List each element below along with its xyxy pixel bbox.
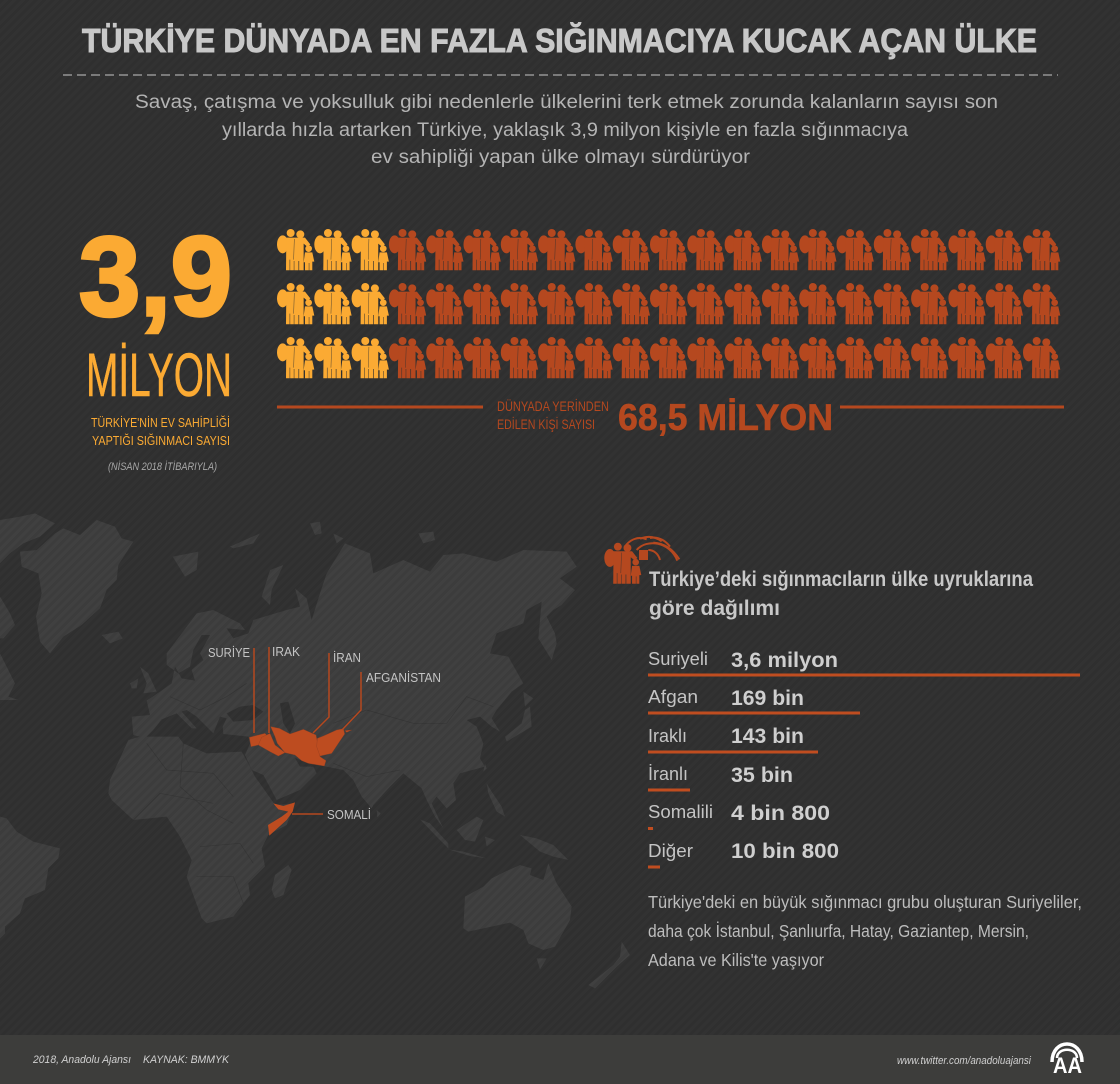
title: TÜRKİYE DÜNYADA EN FAZLA SIĞINMACIYA KUCAK AÇAN ÜLKE [82, 22, 1037, 59]
country labels: SOMALİ [327, 808, 371, 822]
displaced people caption [497, 399, 609, 432]
somalia highlight [268, 802, 295, 836]
intro text [135, 92, 998, 168]
world map [0, 513, 630, 988]
country labels: SURİYE [208, 646, 250, 660]
country labels: İRAN [333, 651, 361, 665]
distribution chart: Afgan [648, 687, 698, 707]
footer credit: 2018, Anadolu Ajansı [32, 1054, 131, 1066]
footer credit [32, 1054, 230, 1066]
distribution chart: 169 bin [731, 687, 804, 710]
distribution chart: Somalili [648, 802, 713, 822]
footer bar [0, 1035, 1120, 1084]
footer credit: KAYNAK: BMMYK [143, 1054, 230, 1066]
distribution chart: Suriyeli [648, 649, 708, 669]
icon: AA logo [1052, 1044, 1082, 1078]
displaced people caption: EDİLEN KİŞİ SAYISI [497, 417, 595, 432]
distribution chart: 143 bin [731, 725, 804, 748]
milyon label: MİLYON [86, 341, 232, 409]
panel heading [649, 568, 1033, 620]
caption for big number [91, 415, 230, 448]
intro text: yıllarda hızla artarken Türkiye, yaklaşık 3,9 milyon kişiyle en fazla sığınmacıya [222, 120, 908, 141]
country labels [208, 645, 441, 822]
country callout lines [254, 647, 361, 814]
distribution chart [648, 649, 1080, 868]
distribution chart: 35 bin [731, 764, 793, 787]
panel heading: Türkiye’deki sığınmacıların ülke uyruklarına [649, 568, 1033, 591]
footer link: www.twitter.com/anadoluajansi [897, 1055, 1031, 1067]
displaced people caption: DÜNYADA YERİNDEN [497, 399, 609, 414]
distribution chart: 4 bin 800 [731, 802, 830, 825]
displaced people number: 68,5 MİLYON [618, 397, 833, 438]
distribution chart: Diğer [648, 841, 693, 861]
closing paragraph: daha çok İstanbul, Şanlıurfa, Hatay, Gaziantep, Mersin, [648, 921, 1029, 941]
icon: AA logo: AA [1053, 1053, 1082, 1078]
big number: 3,9 [79, 214, 232, 339]
pictogram: families [277, 229, 1060, 378]
country labels: AFGANİSTAN [366, 671, 441, 685]
closing paragraph [648, 892, 1082, 970]
intro text: Savaş, çatışma ve yoksulluk gibi nedenlerle ülkelerini terk etmek zorunda kalanların sayısı son [135, 92, 998, 113]
icon: family and tent [604, 537, 679, 584]
distribution chart: 10 bin 800 [731, 840, 839, 863]
country labels: IRAK [272, 645, 301, 659]
caption for big number: YAPTIĞI SIĞINMACI SAYISI [92, 433, 230, 448]
distribution chart: Iraklı [648, 726, 687, 746]
caption for big number: TÜRKİYE'NİN EV SAHİPLİĞİ [91, 415, 230, 430]
intro text: ev sahipliği yapan ülke olmayı sürdürüyor [371, 147, 751, 168]
highlighted countries [249, 727, 352, 766]
panel heading: göre dağılımı [649, 597, 780, 620]
closing paragraph: Adana ve Kilis'te yaşıyor [648, 950, 824, 970]
closing paragraph: Türkiye'deki en büyük sığınmacı grubu oluşturan Suriyeliler, [648, 892, 1082, 912]
distribution chart: İranlı [648, 764, 688, 784]
distribution chart: 3,6 milyon [731, 649, 838, 672]
date note: (NİSAN 2018 İTİBARIYLA) [108, 461, 217, 473]
